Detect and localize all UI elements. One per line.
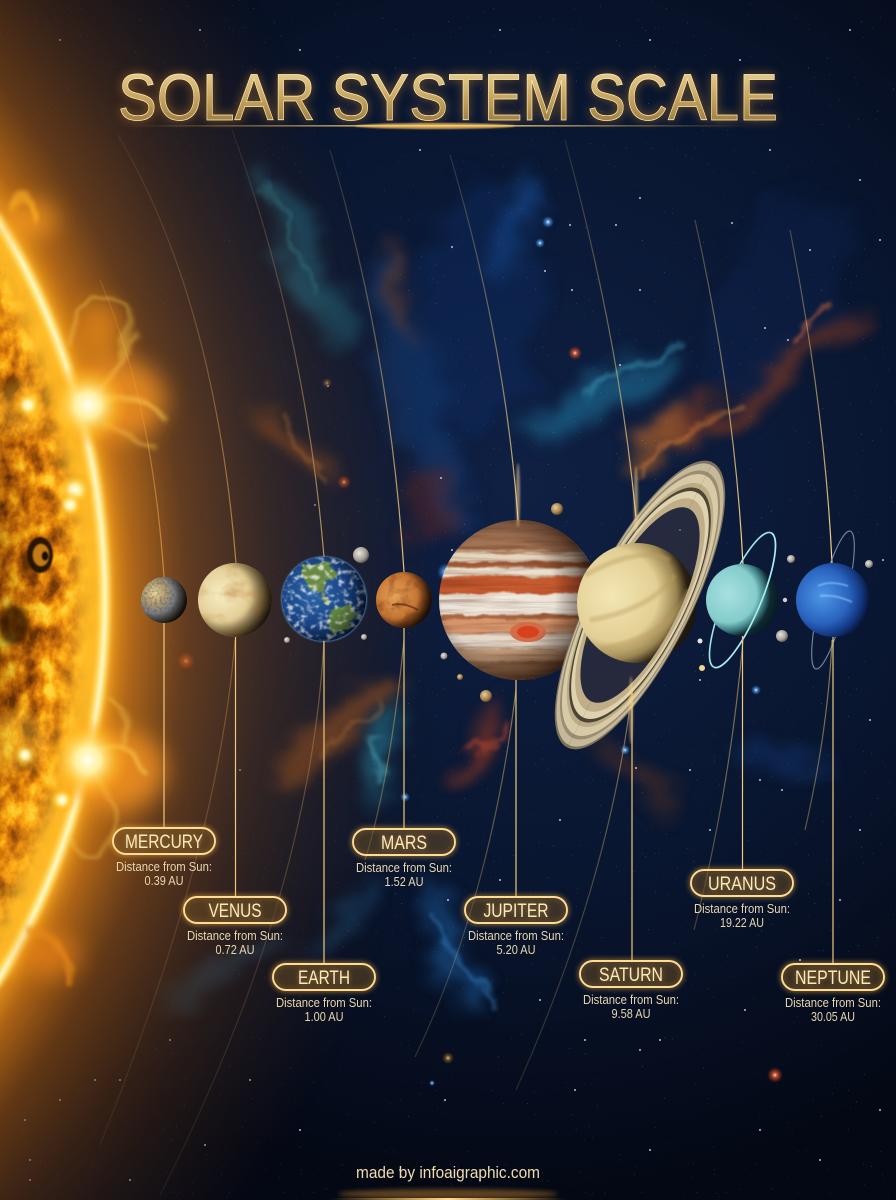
label: Earth — [273, 641, 375, 1024]
label: Jupiter — [465, 680, 567, 957]
planet: Mercury — [141, 577, 187, 623]
Mars name pill: MARS — [381, 833, 427, 854]
Mercury name pill — [113, 828, 215, 854]
title: SOLAR SYSTEM SCALE — [118, 60, 778, 134]
Neptune distance: Distance from Sun: — [785, 995, 881, 1010]
Venus distance: Distance from Sun: — [187, 928, 283, 943]
Mercury name pill: MERCURY — [125, 832, 203, 853]
label: Mercury — [113, 623, 215, 888]
planet: Jupiter — [439, 520, 591, 680]
title underline — [130, 123, 750, 129]
Venus distance: 0.72 AU — [216, 942, 254, 957]
Venus name pill: VENUS — [208, 901, 262, 922]
Mercury distance: 0.39 AU — [144, 873, 184, 888]
planet: Saturn — [554, 460, 726, 750]
Saturn name pill: SATURN — [599, 965, 663, 986]
Neptune ring — [803, 528, 863, 672]
Earth distance: Distance from Sun: — [276, 995, 372, 1010]
Jupiter name pill — [465, 897, 567, 923]
sun rim — [0, 215, 105, 985]
Jupiter name pill: JUPITER — [484, 901, 548, 922]
Uranus distance: 19.22 AU — [720, 915, 764, 930]
glowing stars — [177, 216, 783, 1086]
Mars distance — [356, 860, 452, 889]
Earth distance: 1.00 AU — [304, 1009, 344, 1024]
Neptune name pill — [782, 964, 884, 990]
solar flares — [4, 202, 166, 985]
Uranus distance: Distance from Sun: — [694, 901, 790, 916]
rings, far side — [554, 460, 712, 748]
Jupiter distance: 5.20 AU — [496, 942, 536, 957]
Mars name pill — [353, 829, 455, 855]
footer credit: made by infoaigraphic.com — [356, 1164, 540, 1182]
label: Venus — [184, 637, 286, 957]
planet: Earth — [281, 556, 367, 642]
glow beams at planets — [516, 463, 638, 744]
Jupiter distance: Distance from Sun: — [468, 928, 564, 943]
Uranus ring, far side — [708, 532, 772, 668]
sun — [0, 0, 500, 1200]
label: Neptune — [782, 637, 884, 1024]
label: Uranus — [691, 636, 793, 930]
label: Saturn — [580, 690, 682, 1021]
planet: Venus — [198, 563, 272, 637]
Uranus ring, near side — [714, 532, 776, 668]
bottom glow — [328, 1189, 568, 1200]
planet: Mars — [376, 572, 432, 628]
Mercury distance — [116, 859, 212, 888]
sunspot — [27, 537, 53, 573]
Mars distance: 1.52 AU — [384, 874, 424, 889]
Venus name pill — [184, 897, 286, 923]
Jupiter distance — [468, 928, 564, 957]
sun surface — [0, 270, 90, 942]
Saturn distance — [583, 992, 679, 1021]
Neptune distance: 30.05 AU — [811, 1009, 855, 1024]
Saturn distance: Distance from Sun: — [583, 992, 679, 1007]
Mercury distance: Distance from Sun: — [116, 859, 212, 874]
nebula clouds — [159, 158, 887, 1021]
orbit arcs — [100, 130, 832, 1195]
planet: Uranus — [706, 532, 778, 668]
Neptune distance — [785, 995, 881, 1024]
planet: Neptune — [796, 528, 870, 672]
Neptune name pill: NEPTUNE — [795, 968, 871, 989]
sun halo — [0, 0, 500, 1200]
Earth name pill — [273, 964, 375, 990]
Earth name pill: EARTH — [298, 968, 350, 989]
rings, near side — [568, 462, 726, 750]
Venus distance — [187, 928, 283, 957]
label: Mars — [353, 628, 455, 889]
Uranus name pill: URANUS — [708, 874, 776, 895]
Uranus distance — [694, 901, 790, 930]
Mars distance: Distance from Sun: — [356, 860, 452, 875]
Earth distance — [276, 995, 372, 1024]
Saturn globe — [577, 543, 697, 663]
Uranus name pill — [691, 870, 793, 896]
moons — [284, 503, 873, 702]
Saturn name pill — [580, 961, 682, 987]
Saturn distance: 9.58 AU — [612, 1006, 650, 1021]
